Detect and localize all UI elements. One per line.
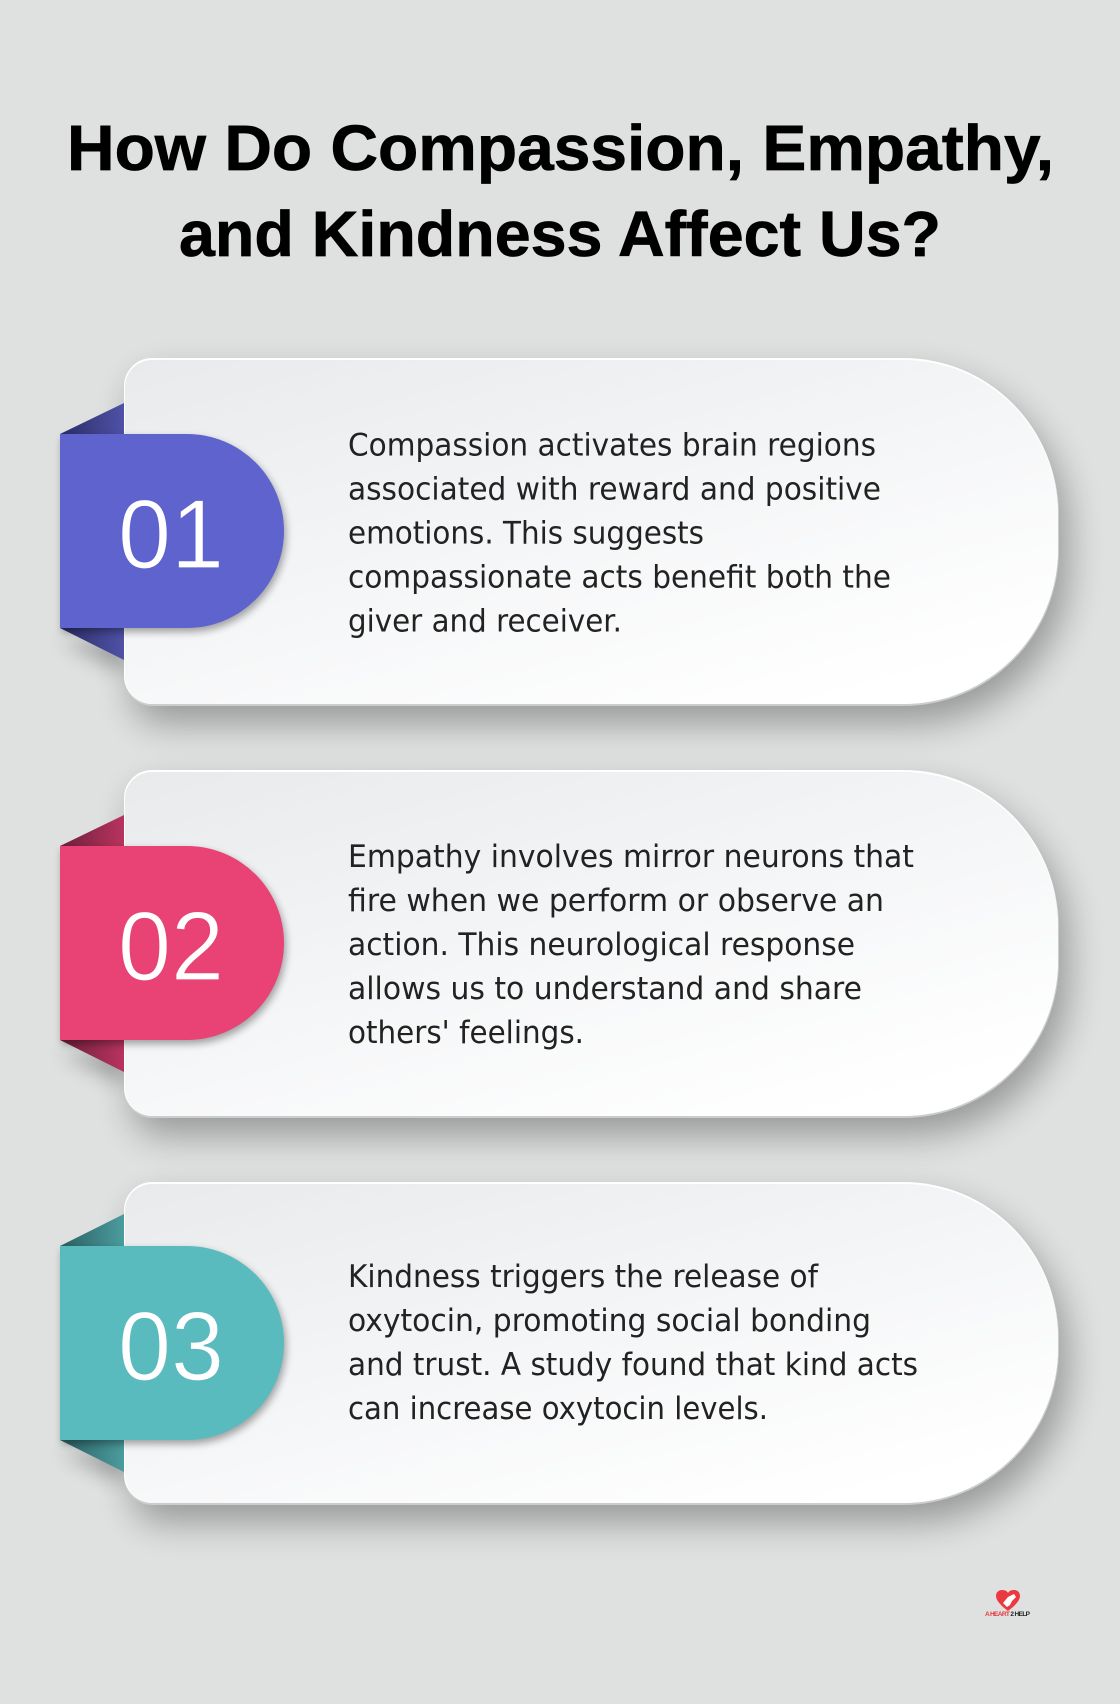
number tab 01 [60,434,286,632]
card 1 [124,358,1068,723]
text block 1: compassionate acts benefit both the [348,560,891,596]
text block 2: Empathy involves mirror neurons that [348,839,914,875]
flap shadow [60,640,124,672]
text block 3 [348,1259,918,1427]
panel: step 2 empathy [60,770,1068,1135]
text block 3: can increase oxytocin levels. [348,1391,768,1427]
text block 2: fire when we perform or observe an [348,883,884,919]
logo wordmark: A HEART 2 HELP [985,1611,1031,1618]
logo: A Heart 2 Help [985,1590,1031,1618]
text block 2: others' feelings. [348,1015,584,1051]
flap shadow [60,1052,124,1084]
ribbon fold bottom [60,628,124,660]
card 2 [124,770,1068,1135]
panel: step 3 kindness [60,1182,1068,1522]
text block 1: emotions. This suggests [348,516,704,552]
ribbon fold top [60,1214,124,1246]
text block 1: Compassion activates brain regions [348,428,876,464]
ribbon fold top [60,815,124,846]
text block 2 [348,839,914,1051]
ribbon fold bottom [60,1440,124,1472]
text block 2: action. This neurological response [348,927,855,963]
number tab 01: 01 [118,479,224,589]
title: and Kindness Affect Us? [179,198,941,270]
text block 1: giver and receiver. [348,604,622,640]
title [67,112,1054,270]
card 3 [124,1182,1068,1522]
number tab 02: 02 [118,891,224,1001]
text block 3: and trust. A study found that kind acts [348,1347,918,1383]
text block 1 [348,428,891,640]
number tab 02 [60,846,286,1044]
number tab 03 [60,1246,286,1444]
text block 1: associated with reward and positive [348,472,881,508]
panel: step 1 compassion [60,358,1068,723]
number tab 03: 03 [118,1291,224,1401]
ribbon fold bottom [60,1040,124,1072]
text block 3: oxytocin, promoting social bonding [348,1303,871,1339]
text block 3: Kindness triggers the release of [348,1259,819,1295]
text block 2: allows us to understand and share [348,971,862,1007]
icon: heart with hands [996,1590,1020,1611]
flap shadow [60,1451,124,1483]
ribbon fold top [60,403,124,434]
title: How Do Compassion, Empathy, [67,112,1054,184]
